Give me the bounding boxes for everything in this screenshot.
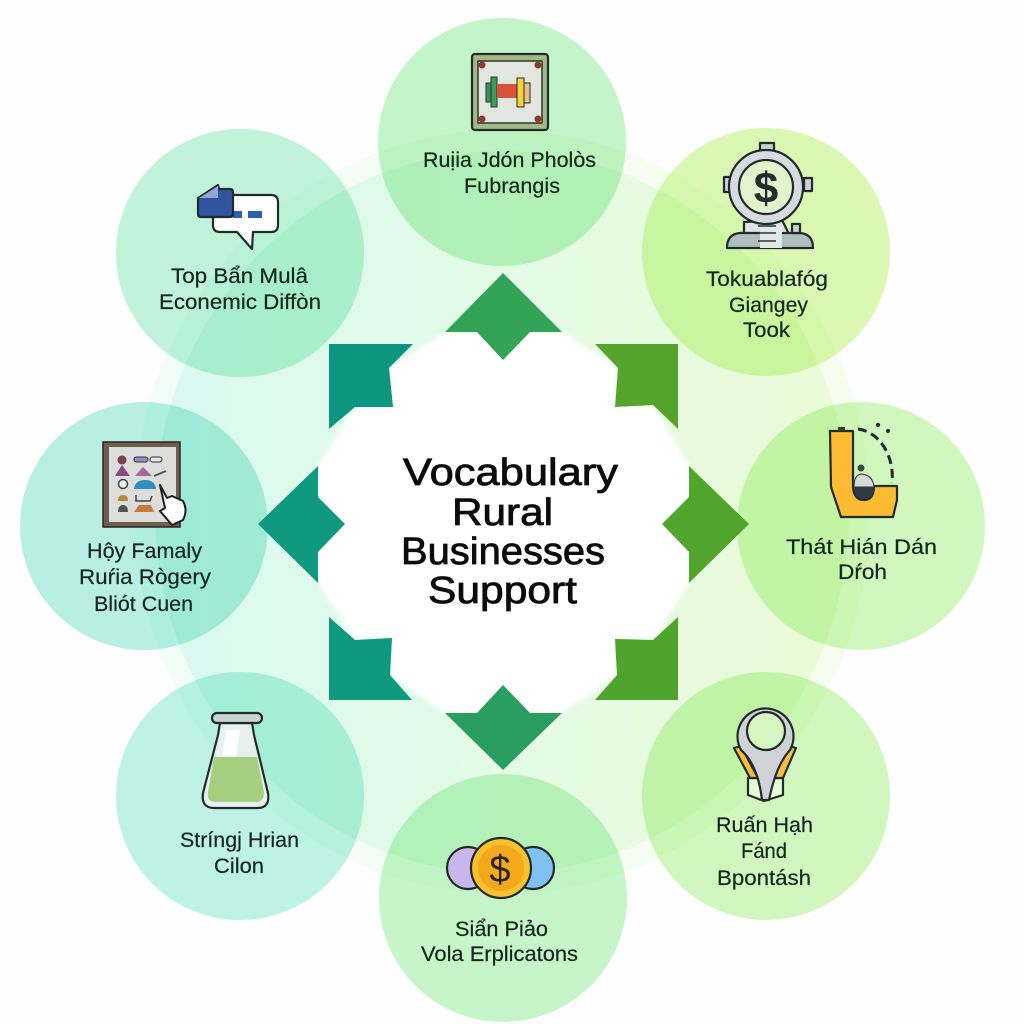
label: left topic: Hộy Famaly [87,540,203,563]
arrow: top [445,273,562,360]
icon: speech bubble with document [198,185,278,249]
panel: bottom right topic circle [642,672,890,920]
label: bottom topic [421,918,578,966]
label: top left topic: Top Bẩn Mulâ [171,265,308,288]
icon: framed dumbbell [472,54,548,130]
label: bottom right topic: Bpontásh [717,867,811,890]
label: top left topic [159,265,321,314]
label: top right topic: Tokuablafóg [706,268,828,291]
label: right topic [786,536,937,584]
label: bottom topic: Vola Erplicatons [421,943,578,966]
icon: framed chart with pointer hand [103,442,186,527]
arrow: right [662,466,749,583]
label: bottom right topic: Ruấn Hạh [716,814,813,837]
icon: dollar machine: $ [754,164,778,213]
title [401,452,618,612]
label: top left topic: Econemic Diffòn [159,291,321,314]
panel: top left topic circle [116,129,364,377]
label: top topic [423,149,596,198]
label: bottom right topic: Fánd [741,840,787,863]
icon: coins [447,838,554,898]
panel: right topic circle [737,402,985,650]
panel: bottom topic circle [379,774,627,1022]
arrow: bottom left [329,617,412,700]
label: top topic: Fubrangis [464,175,560,198]
label: right topic: Thát Hián Dán [786,536,937,559]
icon: location ring with wings [734,708,796,801]
label: left topic: Bliót Cuen [94,593,193,616]
arrow: bottom [445,685,562,770]
icon: yellow L-shaped seat [830,423,897,517]
title: Rural [452,492,553,534]
icon: coins: $ [489,849,511,891]
label: left topic: Ruŕia Rògery [79,566,212,589]
panel: left topic circle [20,402,268,650]
label: bottom left topic [180,829,299,878]
label: bottom left topic: Cilon [214,855,264,878]
label: right topic: Dŕoh [838,561,887,584]
label: top right topic: Took [743,319,791,342]
outer faint ring [134,130,870,894]
arrow: bottom right [595,617,678,700]
icon: dollar machine [724,143,813,248]
icon: flask [203,713,268,808]
label: bottom right topic [716,814,813,890]
title: Support [428,570,577,612]
arrow: top left [329,344,413,429]
arrow: left [258,466,345,583]
white centre star [318,332,689,713]
panel: top right topic circle [642,128,890,376]
label: top topic: Ruịia Jdón Pholòs [423,149,596,172]
label: left topic [79,540,212,616]
title: Vocabulary [403,452,618,494]
arrow: top right [595,344,678,429]
title: Businesses [401,531,605,573]
label: top right topic: Giangey [729,294,809,317]
panel: top topic circle [378,18,626,266]
inner tinted ring [155,151,849,873]
label: bottom topic: Siẩn Piảo [455,918,548,941]
label: top right topic [706,268,828,342]
panel: bottom left topic circle [116,672,364,920]
label: bottom left topic: Stríngj Hrian [180,829,299,852]
